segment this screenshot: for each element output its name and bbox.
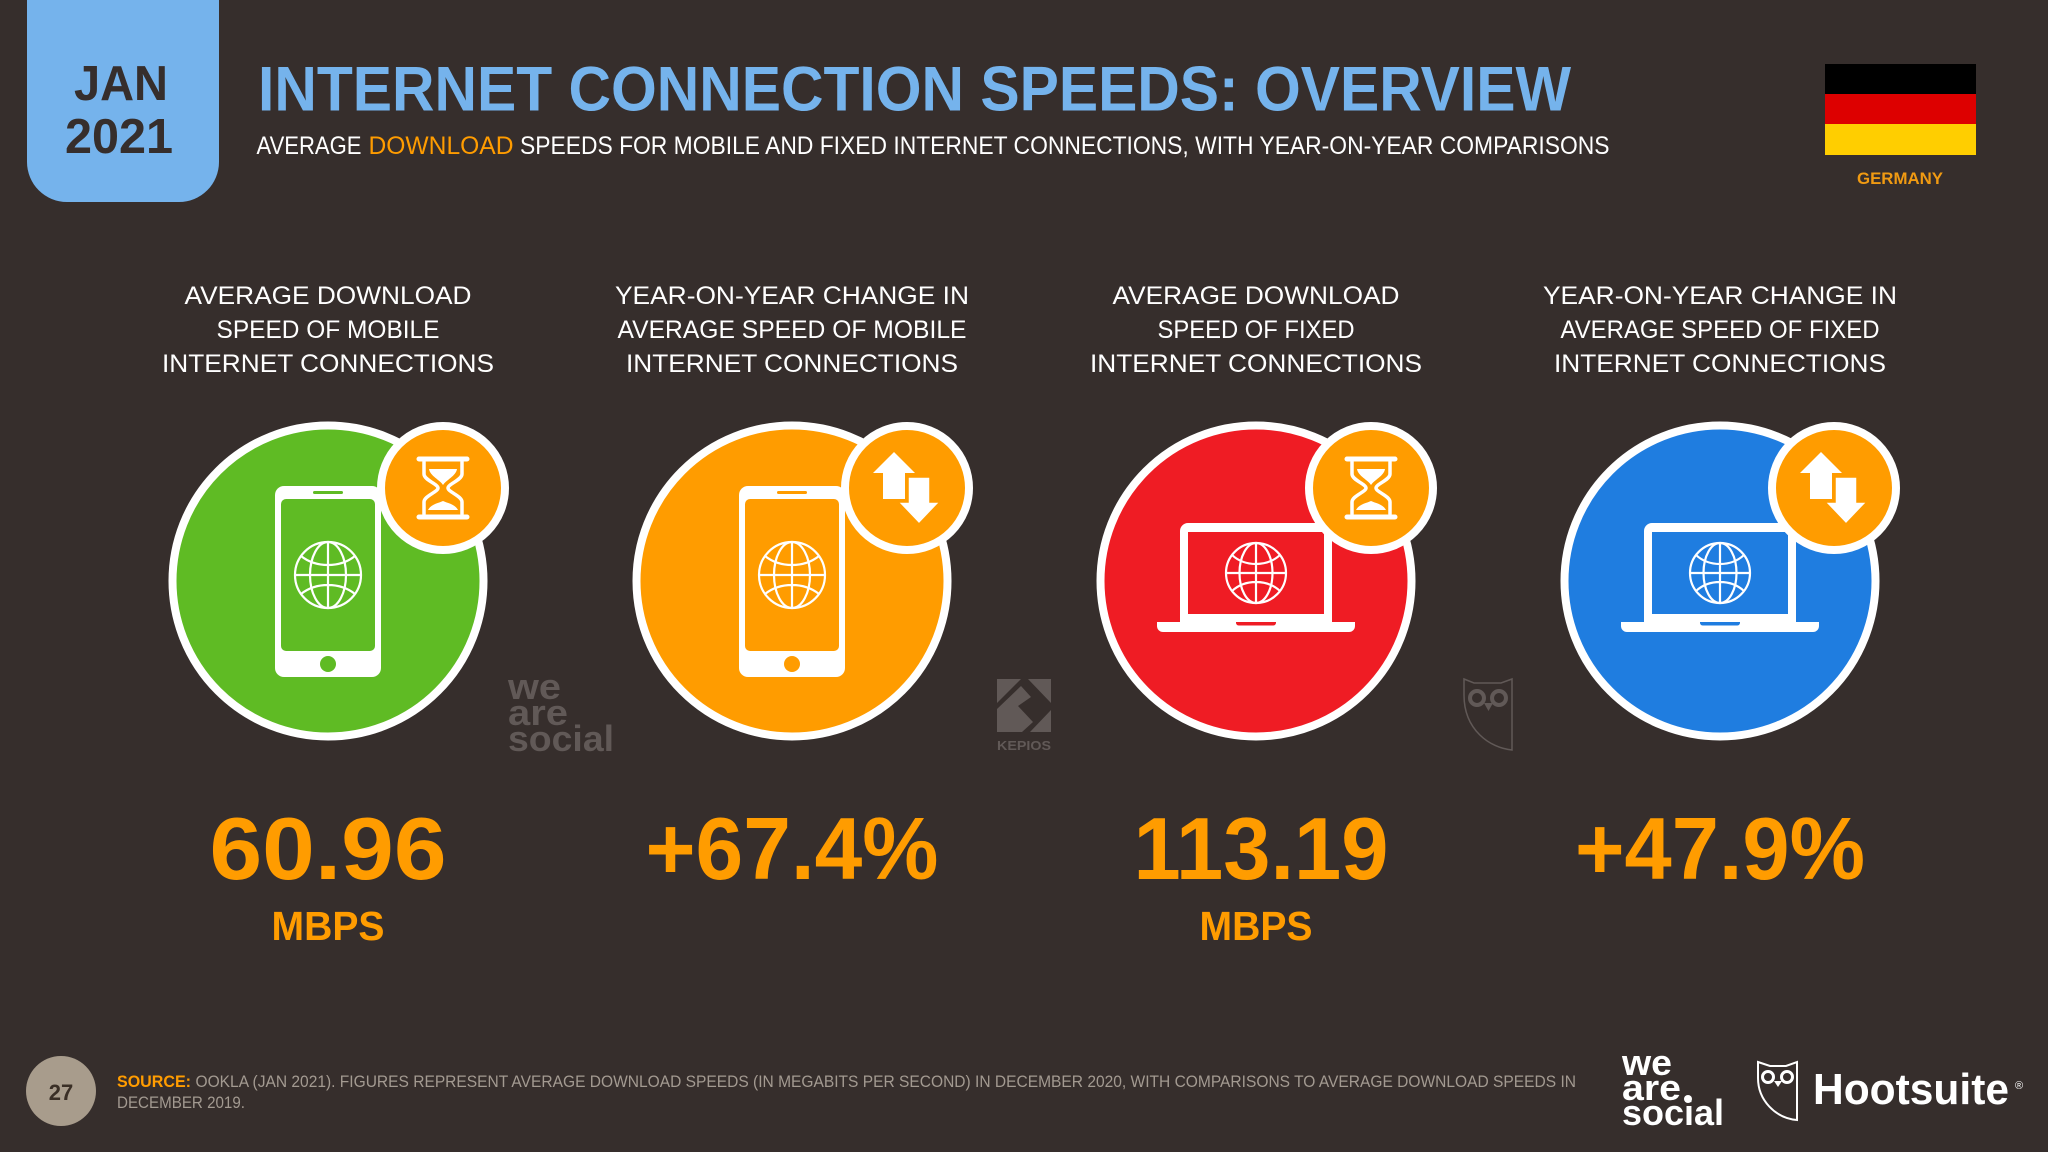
icon: fixed speed (red circle, laptop, hourglass) — [1100, 426, 1433, 736]
logo: Hootsuite: Hootsuite — [1813, 1065, 2009, 1114]
column heading: mobile speed: INTERNET CONNECTIONS — [162, 350, 494, 378]
watermark: Hootsuite owl — [1464, 679, 1512, 750]
logo: we are social: social — [1622, 1092, 1724, 1133]
value: fixed speed — [1134, 799, 1388, 949]
logo: we are social: we — [1621, 1042, 1672, 1083]
logo: Hootsuite — [1758, 1062, 2023, 1120]
column heading: fixed speed: SPEED OF FIXED — [1158, 316, 1354, 344]
value: mobile speed: MBPS — [272, 903, 384, 949]
value: fixed change: +47.9% — [1575, 799, 1865, 898]
date tab: 2021 — [65, 110, 173, 164]
title: INTERNET CONNECTION SPEEDS: OVERVIEW — [258, 54, 1571, 124]
column heading: mobile change: AVERAGE SPEED OF MOBILE — [618, 316, 966, 344]
logo: we are social — [1621, 1042, 1724, 1133]
watermark: we are social — [507, 666, 614, 759]
watermark: Kepios: KEPIOS — [997, 738, 1051, 753]
logo: we are social: are — [1622, 1067, 1681, 1108]
value: mobile speed: 60.96 — [210, 799, 446, 898]
icon: mobile speed (green circle, phone, hourglass) — [172, 426, 505, 736]
logo: Hootsuite: ® — [2015, 1080, 2023, 1092]
source note: OOKLA (JAN 2021). FIGURES REPRESENT AVERAGE DOWNLOAD SPEEDS (IN MEGABITS PER SECOND) IN DECEMBER 2020, WITH COMPARISONS TO AVERAGE DOWNLOAD SPEEDS IN — [196, 1072, 1576, 1091]
watermark: Kepios — [997, 679, 1051, 753]
column heading: mobile change: YEAR-ON-YEAR CHANGE IN — [615, 282, 969, 310]
source note: DECEMBER 2019. — [117, 1093, 245, 1112]
icon: mobile change (orange circle, phone, arrows) — [636, 426, 969, 736]
subtitle: SPEEDS FOR MOBILE AND FIXED INTERNET CONNECTIONS, WITH YEAR-ON-YEAR COMPARISONS — [520, 132, 1610, 160]
column heading: mobile speed — [162, 282, 494, 378]
column heading: fixed speed — [1090, 282, 1422, 378]
flag: Germany — [1825, 64, 1976, 188]
column heading: fixed change: INTERNET CONNECTIONS — [1554, 350, 1886, 378]
page number: 27 — [49, 1080, 73, 1105]
icon: fixed change (blue circle, laptop, arrows) — [1564, 426, 1896, 736]
value: fixed speed: 113.19 — [1134, 799, 1388, 898]
source note — [117, 1072, 1576, 1112]
date tab: JAN — [74, 57, 168, 111]
column heading: mobile speed: SPEED OF MOBILE — [216, 316, 440, 344]
column heading: mobile change — [615, 282, 969, 378]
value: fixed speed: MBPS — [1200, 903, 1312, 949]
column heading: fixed change: YEAR-ON-YEAR CHANGE IN — [1543, 282, 1897, 310]
column heading: fixed speed: AVERAGE DOWNLOAD — [1112, 282, 1400, 310]
column heading: fixed change: AVERAGE SPEED OF FIXED — [1560, 316, 1880, 344]
subtitle: DOWNLOAD — [368, 132, 514, 160]
column heading: fixed change — [1543, 282, 1897, 378]
watermark: we are social: are — [508, 692, 568, 733]
watermark: we are social: social — [508, 718, 614, 759]
watermark: we are social: we — [507, 666, 561, 707]
value: mobile speed — [210, 799, 446, 949]
column heading: fixed speed: INTERNET CONNECTIONS — [1090, 350, 1422, 378]
column heading: mobile change: INTERNET CONNECTIONS — [626, 350, 958, 378]
value: mobile change: +67.4% — [646, 799, 938, 898]
flag: Germany: GERMANY — [1857, 170, 1943, 188]
page number — [26, 1056, 96, 1126]
subtitle: AVERAGE — [256, 132, 362, 160]
source note: SOURCE: — [117, 1072, 191, 1091]
column heading: mobile speed: AVERAGE DOWNLOAD — [184, 282, 472, 310]
date tab — [27, 0, 219, 202]
